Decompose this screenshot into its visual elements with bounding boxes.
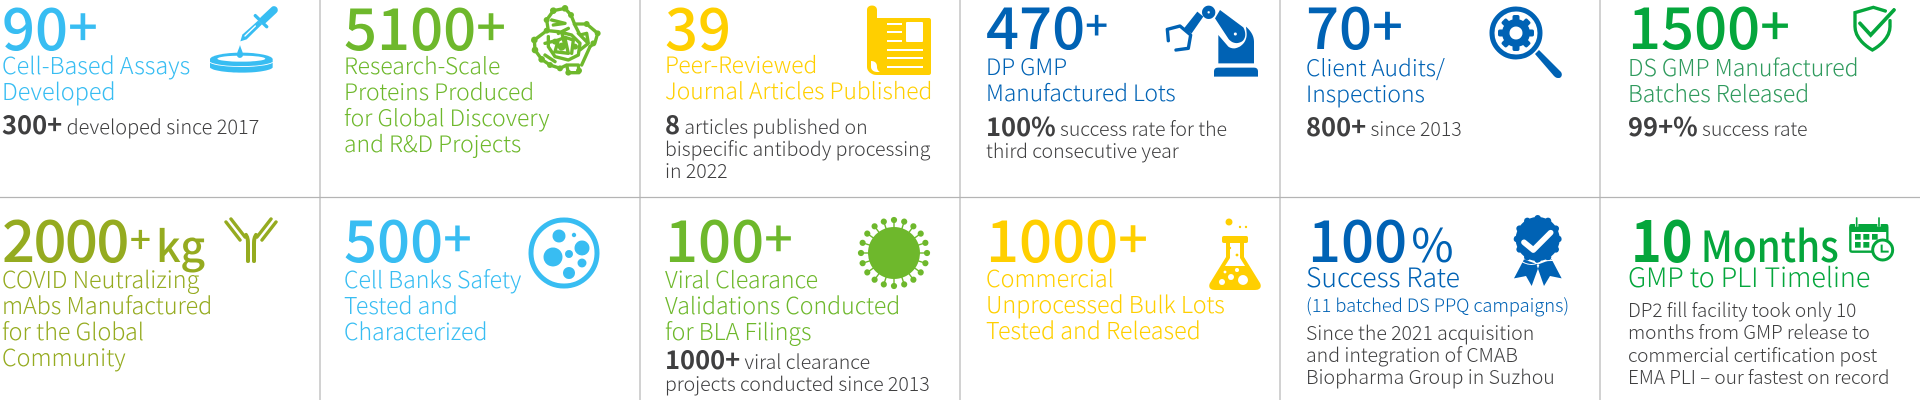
label: commercial unprocessed bulk lots [986, 264, 1225, 342]
label: COVID neutralizing mAbs: for the Global [2, 312, 144, 346]
note: 800+ since 2013: 800+ since 2013 [1306, 107, 1462, 144]
icon: dropper and dish [210, 6, 278, 73]
label: peer-reviewed journal articles: Peer-Reviewed [665, 46, 817, 80]
icon: calendar with clock [1840, 210, 1910, 280]
note: 8 articles published [665, 104, 930, 184]
label: commercial unprocessed bulk lots: Tested and Released [986, 312, 1201, 346]
label: cell-based assays developed: Cell-Based Assays [2, 46, 190, 80]
note: DP2 fill facility: DP2 fill facility took only 10 [1628, 296, 1856, 323]
label: GMP to PLI timeline: GMP to PLI Timeline [1628, 256, 1870, 295]
label: DS GMP manufactured batches: DS GMP Manufactured [1628, 48, 1859, 82]
note: DP2 fill facility [1628, 299, 1889, 389]
label: COVID neutralizing mAbs: mAbs Manufactured [2, 286, 212, 320]
icon: antibody [224, 217, 278, 263]
label: client audits / inspections: Client Audits/ [1306, 48, 1445, 82]
icon: shield check [1853, 6, 1896, 52]
label: peer-reviewed journal articles [665, 46, 932, 106]
note: 100% success rate [986, 107, 1227, 164]
number: 2000+ kg: 2000+kg [2, 195, 205, 279]
icon: robot arm [1166, 6, 1258, 77]
label: research-scale proteins: for Global Discovery [344, 98, 550, 132]
note: 8 articles published: 8 articles published on [665, 104, 868, 142]
note: 300+ developed: 300+ developed since 2017 [2, 105, 259, 142]
label: DS GMP manufactured batches [1628, 48, 1859, 108]
icon: protein structure [531, 5, 601, 76]
note: DP2 fill facility: commercial certification post [1628, 341, 1877, 368]
icon: petri dish [528, 218, 600, 288]
note: 8 articles published: bispecific antibody processing [665, 133, 930, 162]
panel: commercial bulk lots [960, 198, 1280, 398]
label: DS GMP manufactured batches: Batches Released [1628, 74, 1809, 108]
label: cell-based assays developed: Developed [2, 72, 116, 106]
note: 100% success rate: third consecutive year [986, 135, 1179, 164]
note: CMAB acquisition [1306, 320, 1555, 388]
label: viral clearance validations: Validations Conducted [665, 286, 900, 320]
panel: DS GMP batches [1628, 0, 1896, 144]
note: 8 articles published: in 2022 [665, 155, 728, 184]
note: CMAB acquisition: Since the 2021 acquisition [1306, 316, 1534, 346]
number: 1000+: 1000+ [986, 195, 1148, 279]
label: COVID neutralizing mAbs: Community [2, 338, 126, 372]
number: 100+: 100+ [665, 195, 793, 279]
label: research-scale proteins: Research-Scale [344, 46, 500, 80]
label: COVID neutralizing mAbs [2, 260, 212, 372]
panel: journal articles [665, 0, 932, 184]
label: commercial unprocessed bulk lots: Unprocessed Bulk Lots [986, 286, 1225, 320]
icon: award badge [1500, 210, 1575, 295]
label: DP GMP manufactured lots: Manufactured Lots [986, 74, 1176, 108]
label: cell banks safety: Characterized [344, 312, 487, 346]
number: 500+: 500+ [344, 195, 472, 279]
label: viral clearance validations [665, 260, 900, 346]
label: client audits / inspections: Inspections [1306, 74, 1425, 108]
icon: magnifier with gear [1490, 6, 1562, 78]
label: cell-based assays developed [2, 46, 190, 106]
note: 1000+ viral clearance [665, 340, 930, 397]
label: commercial unprocessed bulk lots: Commercial [986, 260, 1114, 294]
label: viral clearance validations: for BLA Filings [665, 312, 811, 346]
panel: research-scale proteins [344, 0, 601, 158]
note: CMAB acquisition: and integration of CMAB [1306, 339, 1518, 368]
label: DP GMP manufactured lots [986, 48, 1176, 108]
number: 10 months: 10Months [1631, 195, 1839, 279]
label: viral clearance validations: Viral Clearance [665, 260, 818, 294]
note: DP2 fill facility: EMA PLI – our fastest on record [1628, 363, 1889, 390]
label: success rate: Success Rate [1306, 256, 1460, 295]
label: PPQ campaigns: (11 batched DS PPQ campaigns) [1306, 292, 1569, 318]
label: client audits / inspections [1306, 48, 1445, 108]
label: cell banks safety [344, 260, 521, 346]
label: research-scale proteins: Proteins Produced [344, 72, 534, 106]
icon: virus [857, 216, 931, 290]
label: DP GMP manufactured lots: DP GMP [986, 48, 1067, 82]
panel: GMP to PLI [1600, 198, 1920, 398]
note: 1000+ viral clearance: projects conducted since 2013 [665, 368, 930, 397]
panel: viral clearance [665, 195, 930, 397]
label: research-scale proteins: and R&D Projects [344, 124, 521, 158]
note: 100% success rate: 100% success rate for the [986, 107, 1227, 144]
panel: DP GMP lots [986, 0, 1258, 164]
panel: client audits [1306, 0, 1562, 144]
panel: COVID mAbs [2, 195, 278, 372]
note: 1000+ viral clearance: 1000+ viral clearance [665, 340, 870, 377]
note: 99+% success rate: 99+% success rate [1628, 107, 1807, 144]
label: COVID neutralizing mAbs: COVID Neutralizing [2, 260, 199, 294]
note: DP2 fill facility: months from GMP release to [1628, 318, 1870, 345]
panel: cell-based assays [2, 0, 278, 142]
number: 100%: 100% [1308, 195, 1454, 279]
label: cell banks safety: Cell Banks Safety [344, 260, 521, 294]
panel: cell banks [344, 195, 600, 346]
icon: flask [1209, 218, 1261, 290]
label: research-scale proteins [344, 46, 550, 158]
label: cell banks safety: Tested and [344, 286, 458, 320]
note: CMAB acquisition: Biopharma Group in Suzhou [1306, 361, 1555, 390]
label: peer-reviewed journal articles: Journal Articles Published [665, 72, 932, 106]
icon: journal [867, 6, 931, 75]
panel: success rate [1280, 198, 1600, 398]
